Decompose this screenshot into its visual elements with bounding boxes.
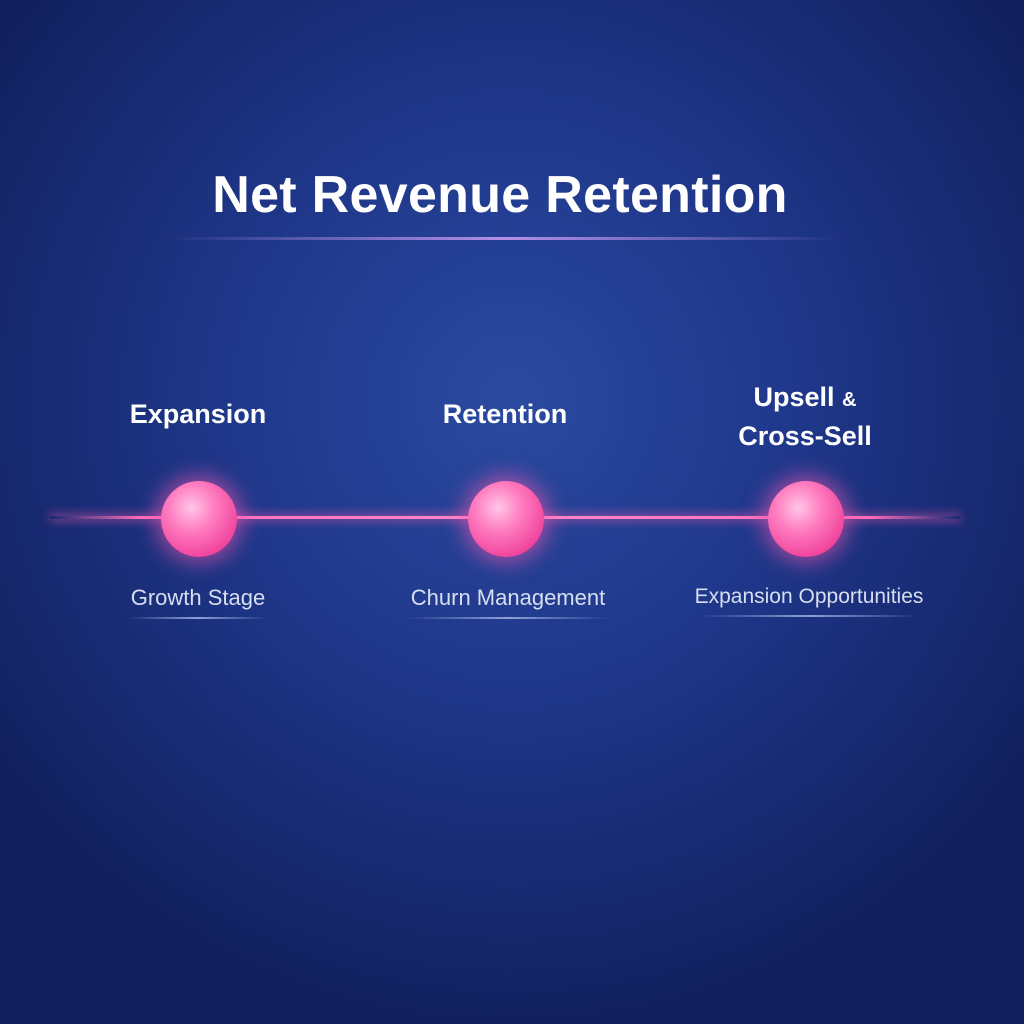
title underline xyxy=(170,237,840,240)
timeline line xyxy=(50,516,960,519)
stage 3 subtitle: Expansion Opportunities xyxy=(695,585,923,608)
stage 3 label: Cross-Sell xyxy=(738,421,872,451)
stage 1 label: Expansion xyxy=(130,399,266,429)
title: Net Revenue Retention xyxy=(212,166,788,224)
stage 2 node xyxy=(468,481,544,557)
stage 3 node xyxy=(768,481,844,557)
stage 3 label xyxy=(738,382,872,451)
stage 1 subtitle: Growth Stage xyxy=(131,585,265,610)
stage 1 node xyxy=(161,481,237,557)
stage 3 label: Upsell & xyxy=(754,382,856,412)
stage 2 label: Retention xyxy=(443,399,567,429)
stage 2 subtitle: Churn Management xyxy=(411,585,605,610)
